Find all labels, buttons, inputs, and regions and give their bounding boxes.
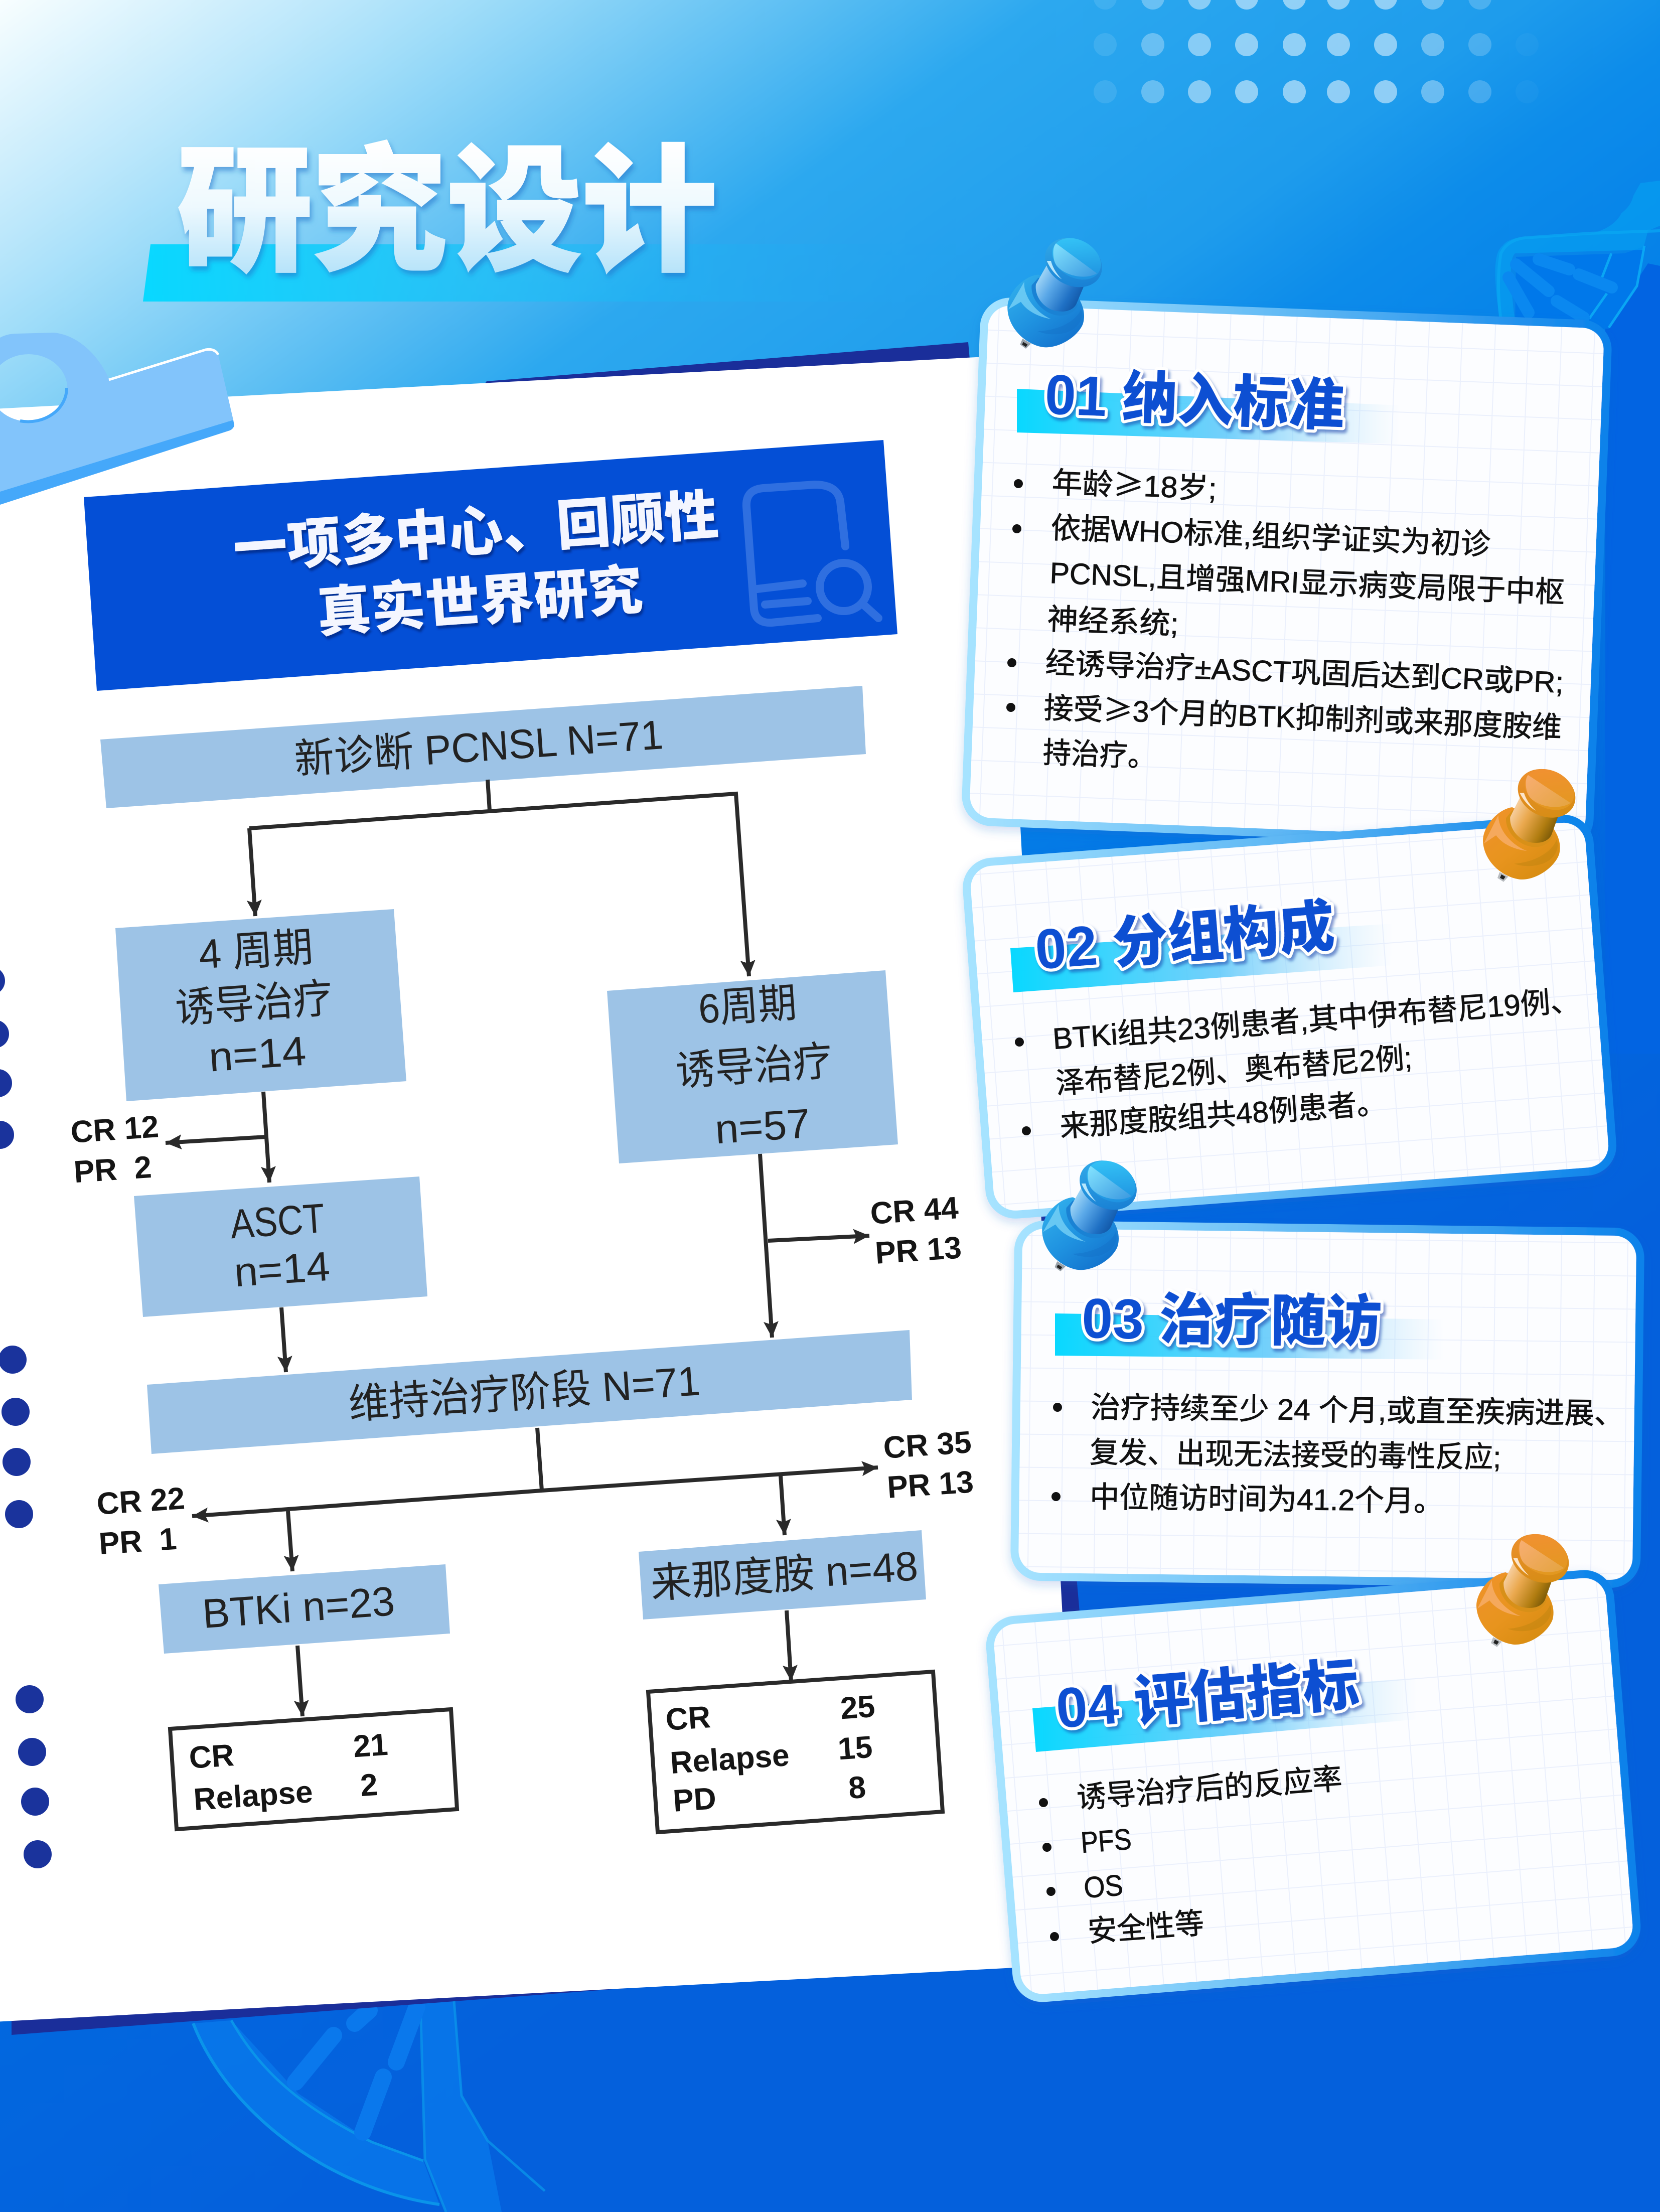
response labels: 2: [359, 1767, 379, 1803]
dot pattern: [1094, 0, 1539, 103]
list: [1006, 459, 1565, 774]
subtitle: [231, 485, 720, 643]
response labels: CR 12: [70, 1109, 160, 1150]
response labels: 25: [839, 1689, 876, 1726]
list: 经诱导治疗±ASCT巩固后达到CR或PR;: [1045, 646, 1564, 699]
icon: book and magnifier: [746, 485, 878, 623]
flow box labels: 来那度胺 n=48: [649, 1543, 920, 1607]
flow box labels: n=14: [207, 1028, 308, 1081]
response labels: CR 22: [96, 1481, 186, 1522]
response labels: CR: [188, 1738, 235, 1776]
heading band: [1010, 924, 1393, 992]
list: 泽布替尼2例、奥布替尼2例;: [1054, 1041, 1413, 1100]
dna decoration bottom left: [193, 2001, 545, 2212]
response labels: PR 13: [886, 1464, 975, 1505]
list: BTKi组共23例患者,其中伊布替尼19例、: [1051, 984, 1581, 1056]
dark right background: [1605, 263, 1660, 1054]
response labels: Relapse: [669, 1738, 791, 1781]
list: 年龄≥18岁;: [1051, 459, 1218, 508]
ring binder dots: [0, 967, 52, 1868]
list: OS: [1083, 1868, 1124, 1904]
response labels: 21: [352, 1727, 389, 1764]
flow box labels: BTKi n=23: [201, 1578, 396, 1637]
response labels: CR 44: [869, 1191, 960, 1231]
flow arrows: [166, 780, 878, 1716]
flow box labels: 6周期: [697, 980, 798, 1033]
list: 接受≥3个月的BTK抑制剂或来那度胺维: [1043, 684, 1563, 747]
list: PFS: [1080, 1823, 1133, 1859]
flow box labels: [174, 712, 920, 1637]
flow result boxes: [170, 1672, 943, 1832]
heading: 03 治疗随访: [1082, 1287, 1382, 1354]
list: [1051, 1391, 1624, 1518]
icon: orange pin 2: [1479, 758, 1588, 883]
icon: blue pin 3: [1042, 1151, 1145, 1271]
flow box labels: n=57: [713, 1101, 812, 1152]
heading band: [1017, 389, 1400, 444]
list: 复发、出现无法接受的毒性反应;: [1090, 1436, 1501, 1474]
clip: [0, 333, 234, 505]
icon: orange pin 4: [1472, 1523, 1582, 1648]
response labels: PR 13: [874, 1230, 963, 1271]
paper backing: [9, 342, 1109, 2035]
response labels: 15: [837, 1730, 873, 1766]
list: 依据WHO标准,组织学证实为初诊: [1050, 511, 1491, 561]
list: 来那度胺组共48例患者。: [1059, 1086, 1387, 1143]
panel: 03 treatment follow-up: [1014, 1224, 1640, 1584]
flow box labels: ASCT: [229, 1196, 326, 1247]
heading: 01 纳入标准: [1044, 363, 1345, 437]
heading band: [1032, 1678, 1417, 1752]
list: 持治疗。: [1042, 736, 1157, 774]
list: [1039, 1762, 1343, 1948]
flow chart: [70, 686, 975, 1832]
subtitle: 真实世界研究: [315, 559, 645, 643]
response labels: 8: [847, 1770, 867, 1806]
flow box labels: 4 周期: [197, 924, 315, 978]
title band: [143, 244, 978, 302]
flow box labels: 诱导治疗: [674, 1039, 834, 1095]
list: 安全性等: [1087, 1906, 1205, 1948]
response labels: CR 35: [882, 1425, 973, 1465]
flow box labels: 新诊断 PCNSL N=71: [293, 712, 664, 783]
icon: blue pin 1: [1007, 228, 1111, 349]
panel: study type header: [84, 440, 897, 691]
flow box labels: 维持治疗阶段 N=71: [347, 1358, 701, 1428]
dna decoration top right: [1495, 181, 1660, 329]
flow box labels: 诱导治疗: [174, 975, 334, 1032]
list: PCNSL,且增强MRI显示病变局限于中枢: [1049, 556, 1565, 609]
list: 诱导治疗后的反应率: [1076, 1762, 1343, 1815]
response labels: PR 2: [73, 1150, 153, 1190]
panel: 01 inclusion criteria: [965, 301, 1608, 845]
flow box labels: n=14: [233, 1244, 332, 1295]
list: [1015, 984, 1581, 1143]
list: 中位随访时间为41.2个月。: [1090, 1481, 1444, 1518]
list: 治疗持续至少 24 个月,或直至疾病进展、: [1091, 1391, 1624, 1430]
list: 神经系统;: [1047, 603, 1179, 641]
response labels: CR: [665, 1700, 712, 1737]
panel: white paper: [0, 356, 1081, 2023]
response labels: PR 1: [98, 1522, 178, 1561]
panel: 02 group composition: [965, 817, 1614, 1217]
panel: 04 endpoints: [988, 1572, 1638, 2000]
heading: 04 评估指标: [1053, 1653, 1361, 1740]
flow boxes: [100, 686, 926, 1654]
response labels: [70, 1109, 975, 1819]
title: 研究设计: [177, 135, 717, 288]
heading: 02 分组构成: [1033, 895, 1337, 981]
response labels: PD: [672, 1781, 717, 1819]
response labels: Relapse: [193, 1775, 314, 1817]
subtitle: 一项多中心、回顾性: [231, 485, 720, 580]
heading band: [1055, 1313, 1444, 1360]
